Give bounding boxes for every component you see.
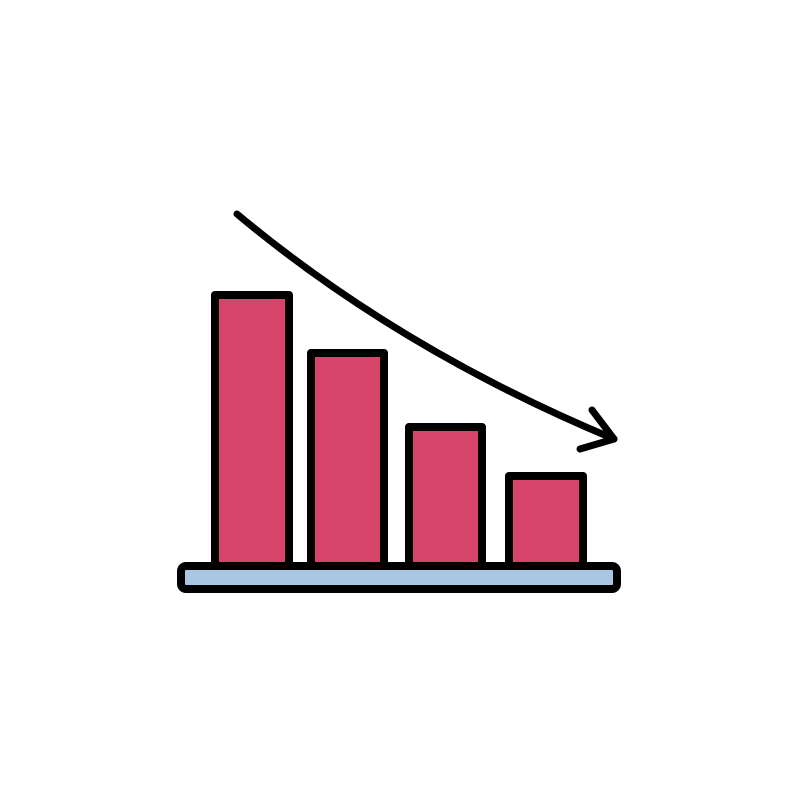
bar 1: [215, 295, 289, 566]
base: [181, 566, 617, 589]
bar 2: [311, 353, 384, 566]
bar 4: [509, 476, 583, 566]
arrow: downward trend: [237, 214, 614, 449]
bar 3: [409, 427, 482, 566]
